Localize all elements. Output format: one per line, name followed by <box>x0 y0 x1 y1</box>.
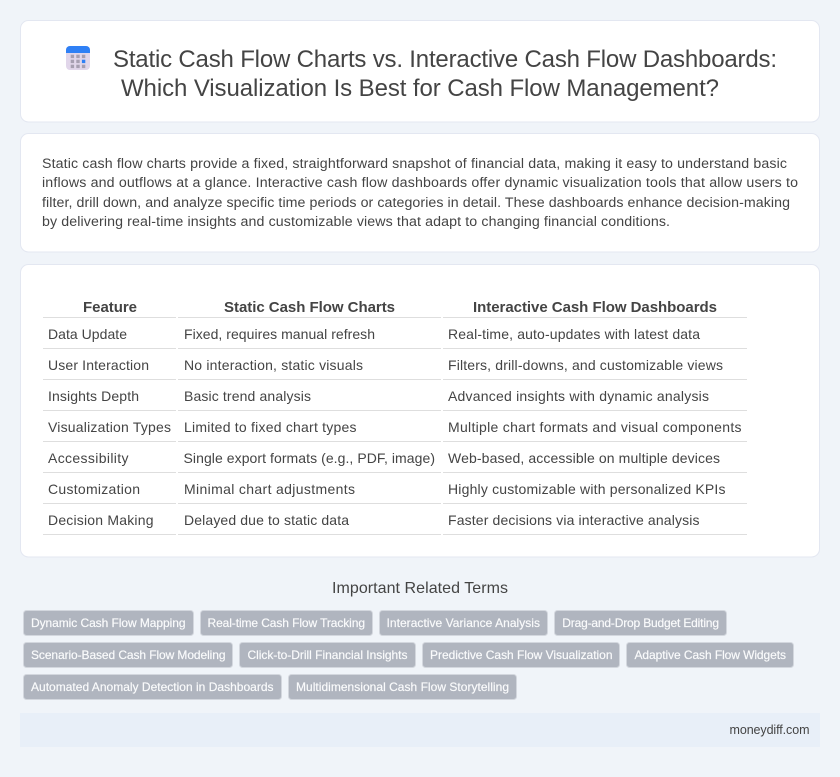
tag: click-to-drill financial insights: Click-to-Drill Financial Insights <box>248 648 408 662</box>
table header row: Feature <box>83 299 137 316</box>
table row: decision making: Decision Making <box>48 512 154 528</box>
heading: important related terms: Important Related Terms <box>332 580 508 597</box>
table row: insights depth: Basic trend analysis <box>184 388 311 404</box>
text block: introduction paragraph: Static cash flow charts provide a fixed, straightforward snapshot of financial data, making it easy to understand basic <box>42 156 787 172</box>
tag: adaptive cash flow widgets <box>626 642 794 668</box>
footer <box>20 713 820 747</box>
footer source text: moneydiff.com <box>730 723 810 737</box>
tag: dynamic cash flow mapping: Dynamic Cash Flow Mapping <box>31 616 186 630</box>
tag: predictive cash flow visualization: Predictive Cash Flow Visualization <box>430 648 612 662</box>
title <box>113 46 777 102</box>
tag: real-time cash flow tracking <box>200 610 372 636</box>
tag: click-to-drill financial insights <box>240 642 416 668</box>
table row: customization: Customization <box>48 481 140 497</box>
tag: multidimensional cash flow storytelling <box>288 674 516 700</box>
table row: customization: Highly customizable with personalized KPIs <box>448 481 726 497</box>
title: Static Cash Flow Charts vs. Interactive Cash Flow Dashboards: <box>113 46 777 73</box>
table row: user interaction: Filters, drill-downs, and customizable views <box>448 357 723 373</box>
tag: dynamic cash flow mapping <box>24 610 194 636</box>
text block: introduction paragraph <box>42 156 798 230</box>
table row: data update: Data Update <box>48 326 127 342</box>
title: Which Visualization Is Best for Cash Flow Management? <box>121 75 719 102</box>
tag: scenario-based cash flow modeling: Scenario-Based Cash Flow Modeling <box>31 648 226 662</box>
table header row: Static Cash Flow Charts <box>224 299 395 316</box>
table row: user interaction <box>48 357 723 373</box>
table row: visualization types: Multiple chart formats and visual components <box>448 419 742 435</box>
table row: visualization types: Visualization Types <box>48 419 171 435</box>
tag: automated anomaly detection in dashboards <box>24 674 282 700</box>
text block: introduction paragraph: by delivering real-time insights and customizable views that adapt to changing financial conditions. <box>42 214 670 230</box>
table row: visualization types: Limited to fixed chart types <box>184 419 356 435</box>
table row: accessibility: Web-based, accessible on multiple devices <box>448 450 720 466</box>
panel: introduction <box>20 134 820 252</box>
text block: introduction paragraph: filter, drill down, and analyze specific time periods or categories in detail. These dashboards enhance decision-making <box>42 195 790 211</box>
tag: interactive variance analysis: Interactive Variance Analysis <box>386 616 540 630</box>
table row: insights depth: Advanced insights with dynamic analysis <box>448 388 709 404</box>
tag: drag-and-drop budget editing: Drag-and-Drop Budget Editing <box>562 616 719 630</box>
tag: predictive cash flow visualization <box>422 642 620 668</box>
table header row: Interactive Cash Flow Dashboards <box>473 299 717 316</box>
panel: title header <box>20 20 820 122</box>
tag: scenario-based cash flow modeling <box>24 642 232 668</box>
table row: insights depth: Insights Depth <box>48 388 139 404</box>
table row: accessibility <box>48 450 720 466</box>
table row: customization: Minimal chart adjustments <box>184 481 355 497</box>
panel: comparison table <box>20 264 820 557</box>
table row: visualization types <box>48 419 742 435</box>
table row: user interaction: User Interaction <box>48 357 149 373</box>
table row: data update <box>48 326 700 342</box>
table row: accessibility: Accessibility <box>48 450 128 466</box>
tag: interactive variance analysis <box>380 610 548 636</box>
tag: multidimensional cash flow storytelling: Multidimensional Cash Flow Storytelling <box>296 680 509 694</box>
table row: user interaction: No interaction, static visuals <box>184 357 363 373</box>
tag: drag-and-drop budget editing <box>554 610 726 636</box>
table row: accessibility: Single export formats (e.g., PDF, image) <box>184 450 435 466</box>
table row: insights depth <box>48 388 709 404</box>
tag: adaptive cash flow widgets: Adaptive Cash Flow Widgets <box>634 648 786 662</box>
table row: decision making <box>48 512 700 528</box>
table header row <box>83 299 717 316</box>
table row: customization <box>48 481 726 497</box>
table row: decision making: Delayed due to static data <box>184 512 349 528</box>
table row: data update: Real-time, auto-updates with latest data <box>448 326 700 342</box>
table row: decision making: Faster decisions via interactive analysis <box>448 512 700 528</box>
tag: real-time cash flow tracking: Real-time Cash Flow Tracking <box>208 616 365 630</box>
icon: calendar <box>66 46 90 70</box>
tag: automated anomaly detection in dashboards: Automated Anomaly Detection in Dashboards <box>31 680 274 694</box>
related terms tags <box>24 610 794 700</box>
text block: introduction paragraph: inflows and outflows at a glance. Interactive cash flow dashboards offer dynamic visualization tools that allow users to <box>42 175 798 191</box>
table row: data update: Fixed, requires manual refresh <box>184 326 375 342</box>
